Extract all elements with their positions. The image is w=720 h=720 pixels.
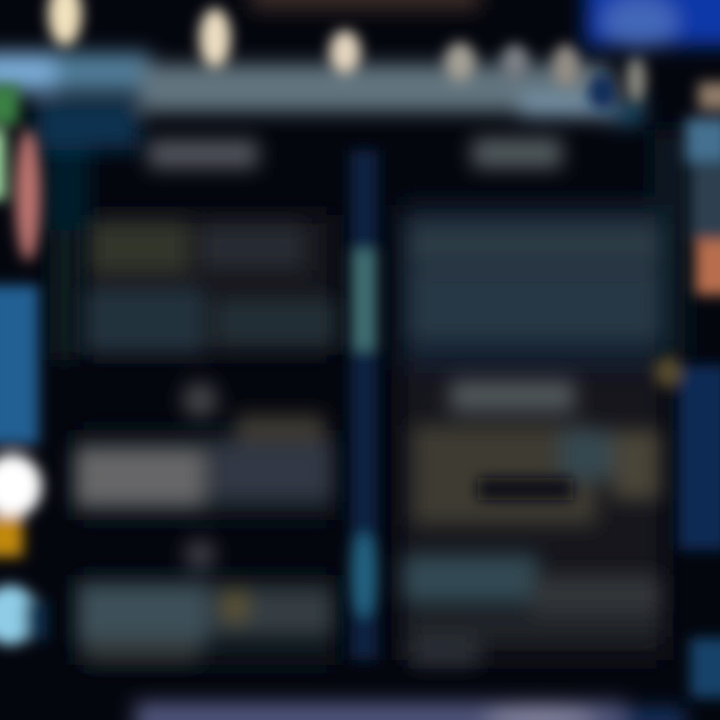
- left panel grey block: [75, 447, 205, 507]
- right panel heading: [472, 138, 562, 168]
- bottom footer bar: [135, 702, 685, 720]
- right panel lower rows: [403, 555, 538, 603]
- header band: [0, 52, 645, 360]
- left panel rows: [90, 222, 190, 274]
- right panel upper rows: [410, 224, 660, 266]
- right panel brown block: [412, 425, 597, 525]
- panel backgrounds: [75, 130, 685, 665]
- left panel divider dot: [182, 382, 218, 418]
- right edge tabs: [654, 82, 720, 698]
- left edge tab icons: [0, 85, 47, 645]
- panel: left column: [75, 140, 335, 662]
- header title glyph highlights: [48, 0, 646, 110]
- panel: right column: [403, 138, 660, 666]
- panel: centre divider: [350, 150, 378, 660]
- top right blue corner: [585, 0, 720, 48]
- right panel mid heading: [450, 380, 575, 412]
- left panel bottom block: [78, 584, 208, 644]
- top centre brown strip: [250, 0, 480, 10]
- left panel heading: [148, 140, 258, 168]
- right panel dark label: [478, 478, 573, 500]
- left panel second dot: [184, 539, 216, 571]
